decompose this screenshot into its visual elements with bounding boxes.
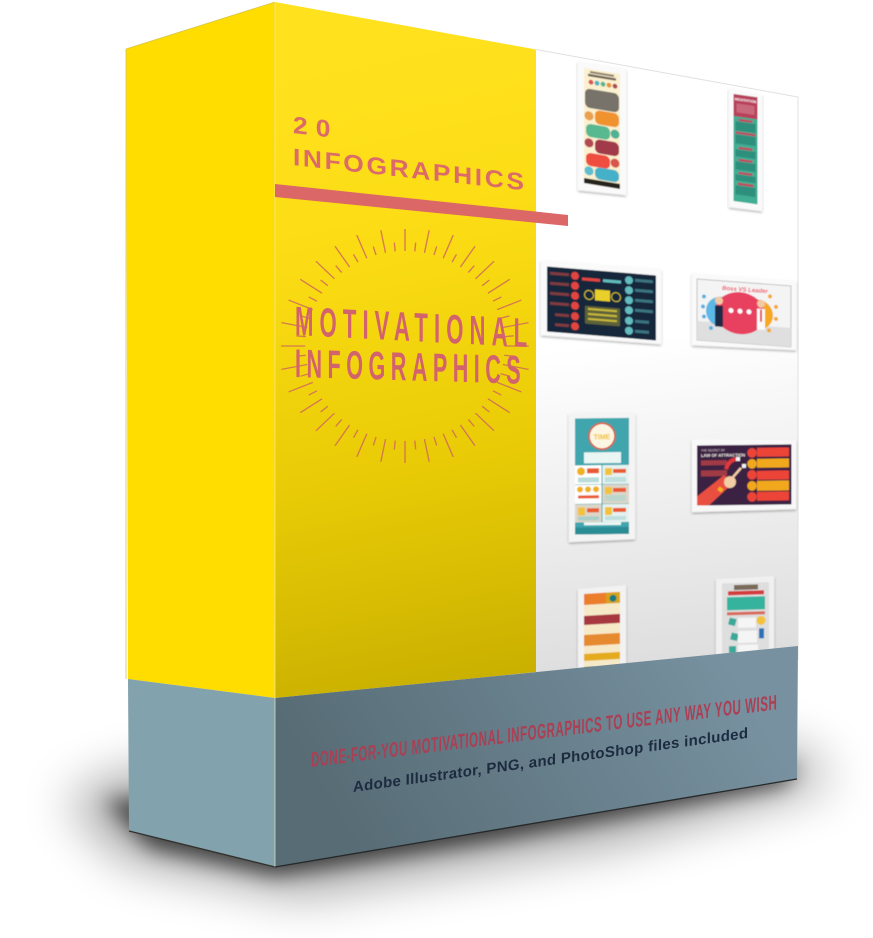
title: motivational infographics: MOTIVATIONAL	[295, 298, 527, 356]
subtitle: included file formats: Adobe Illustrator, PNG, and PhotoShop files included	[353, 725, 748, 796]
tagline: done-for-you: DONE-FOR-YOU MOTIVATIONAL INFOGRAPHICS TO USE ANY WAY YOU WISH	[311, 691, 777, 772]
thumbnail: law of attraction	[692, 439, 796, 512]
thumbnail: law of attraction: LAW OF ATTRACTION	[701, 452, 745, 458]
thumbnail: boss vs leader: Boss VS Leader	[722, 286, 768, 295]
thumbnail: grey tips poster	[716, 576, 774, 664]
thumbnail: time management	[569, 413, 635, 542]
accent bar	[275, 184, 568, 226]
front face white panel	[536, 50, 798, 680]
thumbnail: social media personalities	[578, 61, 626, 195]
thumbnail: dark motivation chart	[541, 260, 661, 344]
left side face of box	[126, 2, 275, 867]
title: motivational infographics	[295, 298, 527, 392]
heading: 20 infographics	[293, 112, 524, 196]
thumbnail: meditation	[729, 88, 762, 211]
thumbnail: time management: TIME	[594, 434, 611, 441]
heading: 20 infographics: INFOGRAPHICS	[293, 144, 524, 196]
thumbnail: meditation: MEDITATION	[735, 97, 757, 104]
thumbnail: boss vs leader	[692, 273, 796, 350]
front face grey band	[275, 646, 798, 867]
title: motivational infographics: INFOGRAPHICS	[295, 341, 521, 392]
thumbnail: law of attraction: THE SECRET OF	[701, 448, 725, 452]
front face yellow panel	[275, 2, 536, 698]
white panel outline	[536, 50, 798, 660]
heading: 20 infographics: 20	[293, 112, 330, 143]
box edges	[275, 2, 797, 867]
thumbnail: orange recipe list	[578, 585, 626, 672]
ground shadow	[65, 748, 835, 895]
sunburst rays	[281, 229, 529, 463]
